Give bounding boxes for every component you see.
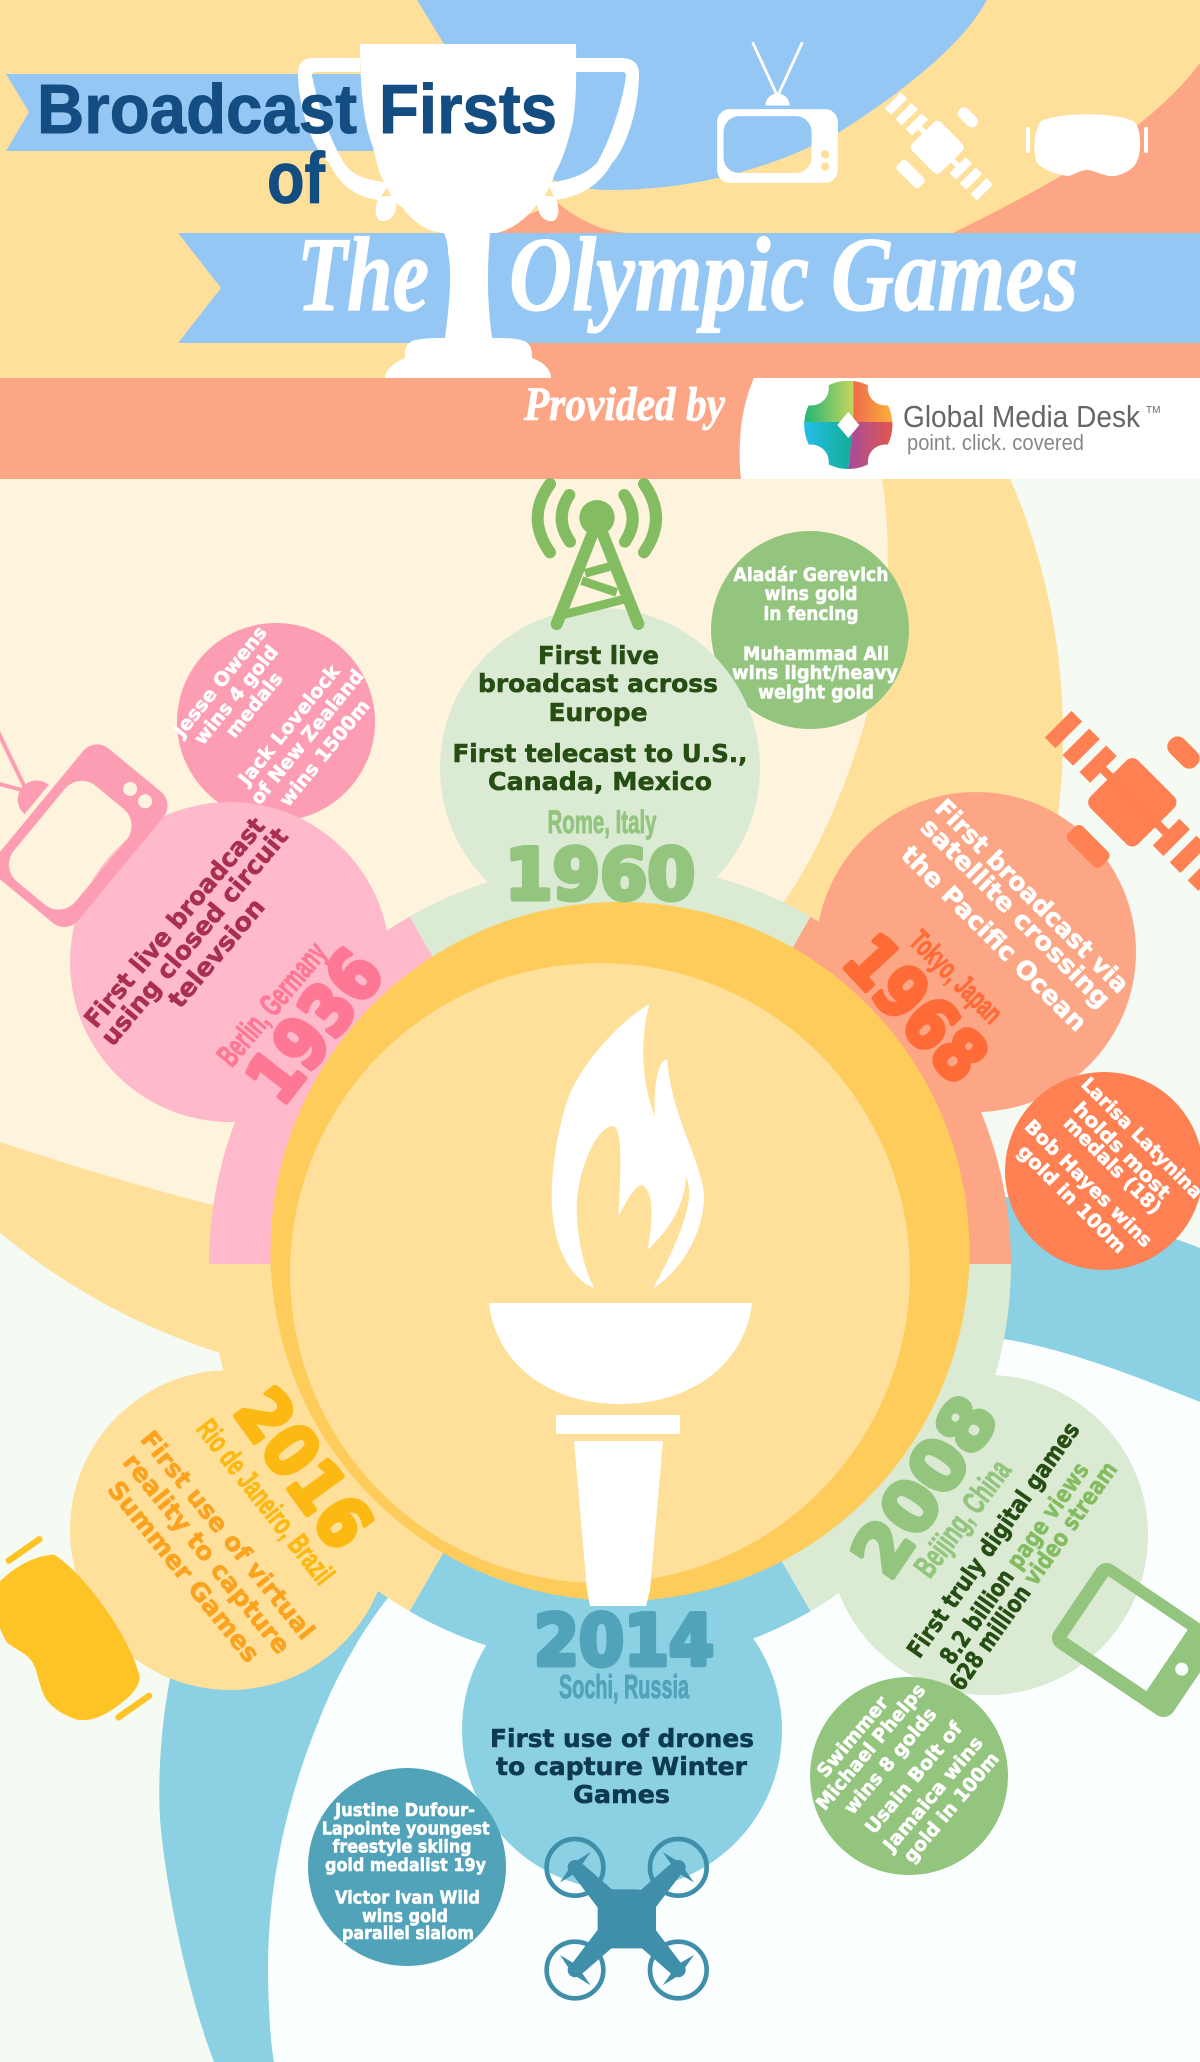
label: Rome, Italy: Rome, Italy: [548, 804, 657, 840]
text: 1960 firsts: First live: [538, 641, 659, 670]
icon: radio tower: [538, 484, 656, 624]
title: Broadcast Firsts of: Firsts: [379, 70, 557, 148]
year: 1936: 1936: [230, 934, 400, 1118]
text: 1960 athletes: wins light/heavy: [732, 662, 899, 684]
icon: header VR headset: [1026, 114, 1148, 176]
bubble: small blue facts circle: [308, 1768, 506, 1966]
text: 2008 athletes: [812, 1680, 1004, 1867]
logo wordmark: TM: [1146, 405, 1160, 416]
icon: olympic torch: [489, 1004, 752, 1606]
label: Berlin, Germany: Berlin, Germany: [210, 935, 334, 1073]
text: 1960 firsts: First telecast to U.S.,: [452, 739, 748, 768]
icon: trophy: [298, 44, 639, 378]
title: Broadcast Firsts of: of: [267, 139, 326, 219]
text: 2008 athletes: wins 8 golds: [840, 1704, 941, 1819]
text: 2014 first: First use of drones: [490, 1724, 754, 1753]
text: 2016 first: reality to capture: [117, 1448, 296, 1660]
background: white inner area: [268, 1339, 1200, 2062]
text: 1968 first: satellite crossing: [915, 812, 1116, 1014]
text: 1936 athletes: Jack Lovelock: [233, 661, 345, 791]
icon: drone: [547, 1839, 707, 1998]
text: 1960 athletes: weight gold: [758, 682, 874, 704]
icon: header satellite: [860, 67, 1018, 225]
text: 1960 athletes: Aladár Gerevich: [734, 564, 888, 586]
bubble: small orange facts circle: [1005, 1072, 1200, 1270]
bubble: small pink facts circle: [177, 623, 375, 821]
text: 1960 athletes: Muhammad Ali: [743, 643, 889, 665]
title: The Olympic Games: The: [297, 216, 429, 333]
text: 1968 athletes: Bob Hayes wins: [1020, 1116, 1156, 1252]
label: Beijing, China: Beijing, China: [907, 1453, 1018, 1584]
text: 1960 athletes: [732, 564, 899, 704]
text: 1960 firsts: Canada, Mexico: [488, 767, 712, 796]
text: 2008 athletes: Michael Phelps: [812, 1680, 930, 1815]
title: Broadcast Firsts of: Broadcast: [37, 70, 357, 148]
icon: yellow VR headset: [0, 1528, 162, 1748]
bubble: 2008 green circle: [828, 1375, 1148, 1695]
text: 2014 athletes: freestyle skiing: [332, 1836, 472, 1858]
text: 2008 first: First truly digital games: [901, 1417, 1086, 1663]
text: 2014 first: Games: [573, 1780, 670, 1809]
text: 1968 athletes: gold in 100m: [1013, 1141, 1130, 1258]
logo wordmark: [903, 399, 1160, 455]
bubble: small green facts circle 1960: [711, 531, 909, 729]
text: 1936 athletes: medals: [221, 668, 287, 742]
text: 2014 athletes: Lapointe youngest: [322, 1818, 490, 1840]
ribbon: The Olympic Games: [178, 233, 1200, 343]
label: Tokyo, Japan: Tokyo, Japan: [903, 924, 1009, 1030]
logo panel: [740, 370, 1200, 480]
logo wordmark: Global Media Desk: [903, 399, 1140, 434]
logo wordmark: point. click. covered: [907, 430, 1084, 455]
text: 2008 first: 628 million video stream: [944, 1456, 1123, 1696]
text: 2008 athletes: Usain Bolt of: [861, 1717, 967, 1838]
text: 1936 athletes: Jesse Owens: [168, 622, 272, 743]
icon: orange satellite: [1005, 669, 1200, 931]
text: 2008 first: 8.2 billion page views: [934, 1457, 1095, 1670]
text: 1960 firsts: Europe: [548, 698, 648, 727]
text: 2008 athletes: Swimmer: [813, 1692, 894, 1782]
text: 2014 athletes: [322, 1800, 490, 1944]
icon: tablet: [1047, 1558, 1200, 1722]
text: 2014 athletes: gold medalist 19y: [325, 1855, 486, 1876]
year: 1968: 1968: [828, 919, 1004, 1099]
text: 2014 first: [490, 1724, 754, 1809]
label: Sochi, Russia: Sochi, Russia: [559, 1668, 689, 1705]
background ring: blue: [159, 1197, 1200, 2062]
sector wheel behind the torch: [209, 863, 1011, 1665]
bubble: 2014 blue circle: [462, 1570, 782, 1890]
bubble: small green facts circle 2008: [810, 1677, 1008, 1875]
text: 1960 firsts: [452, 641, 748, 796]
title: The Olympic Games: Olympic Games: [509, 216, 1078, 333]
bubble: 1936 pink circle: [70, 802, 390, 1122]
text: 1960 athletes: in fencing: [764, 603, 858, 625]
bubble: 2016 yellow circle: [70, 1370, 390, 1690]
ribbon: Broadcast Firsts: [6, 74, 625, 151]
text: 1936 athletes: [168, 622, 375, 811]
text: 2016 first: Summer Games: [102, 1475, 266, 1668]
label: Rio de Janeiro, Brazil: Rio de Janeiro, Brazil: [190, 1413, 340, 1591]
central disc: [270, 902, 970, 1601]
text: 1968 first: the Pacific Ocean: [895, 840, 1093, 1037]
text: 2014 first: to capture Winter: [496, 1752, 748, 1781]
title: The Olympic Games: [297, 216, 1078, 333]
text: 2014 athletes: Victor Ivan Wild: [335, 1888, 480, 1908]
header background: [0, 0, 1200, 378]
background ring: yellow: [0, 87, 1063, 1383]
text: 1968 athletes: medals (18): [1059, 1112, 1166, 1219]
year: 1960: 1960: [505, 834, 695, 916]
bubble: 1960 green circle: [440, 608, 760, 928]
text: 1936 athletes: of New Zealand: [246, 665, 368, 809]
text: 1960 athletes: wins gold: [764, 583, 858, 605]
text: 2014 athletes: parallel slalom: [342, 1923, 474, 1944]
icon: header television: [717, 42, 838, 183]
icon: pink television: [0, 677, 175, 934]
text: 1936 first: using closed circuit: [95, 822, 294, 1051]
year: 2008: 2008: [836, 1382, 1014, 1592]
text: 1936 first: First live broadcast: [78, 812, 271, 1033]
provided-by band: [0, 378, 1200, 479]
text: 1936 first: televsion: [162, 892, 271, 1014]
text: 1960 firsts: broadcast across: [478, 669, 718, 698]
text: 2008 athletes: gold in 100m: [899, 1748, 1004, 1867]
text: 1936 athletes: wins 1500m: [275, 695, 375, 811]
provided-by label: Provided by: [523, 378, 726, 431]
title: Broadcast Firsts of: [37, 70, 557, 219]
text: 1968 first: First broadcast via: [929, 793, 1135, 999]
year: 2014: 2014: [534, 1600, 714, 1682]
background ring: pale cream: [0, 479, 888, 1225]
text: 1968 athletes: [1013, 1073, 1200, 1258]
year: 2016: 2016: [219, 1374, 388, 1564]
text: 2016 first: First use of virtual: [135, 1425, 321, 1645]
text: 1968 athletes: holds most: [1069, 1098, 1175, 1204]
icon: Global Media Desk logo: [804, 381, 892, 469]
text: 2014 athletes: wins gold: [362, 1906, 448, 1927]
text: 2014 athletes: Justine Dufour-: [333, 1800, 475, 1821]
text: 2008 athletes: Jamaica wins: [878, 1732, 988, 1858]
bubble: 1968 salmon circle: [816, 792, 1136, 1112]
text: 1936 athletes: wins 4 gold: [190, 641, 283, 749]
